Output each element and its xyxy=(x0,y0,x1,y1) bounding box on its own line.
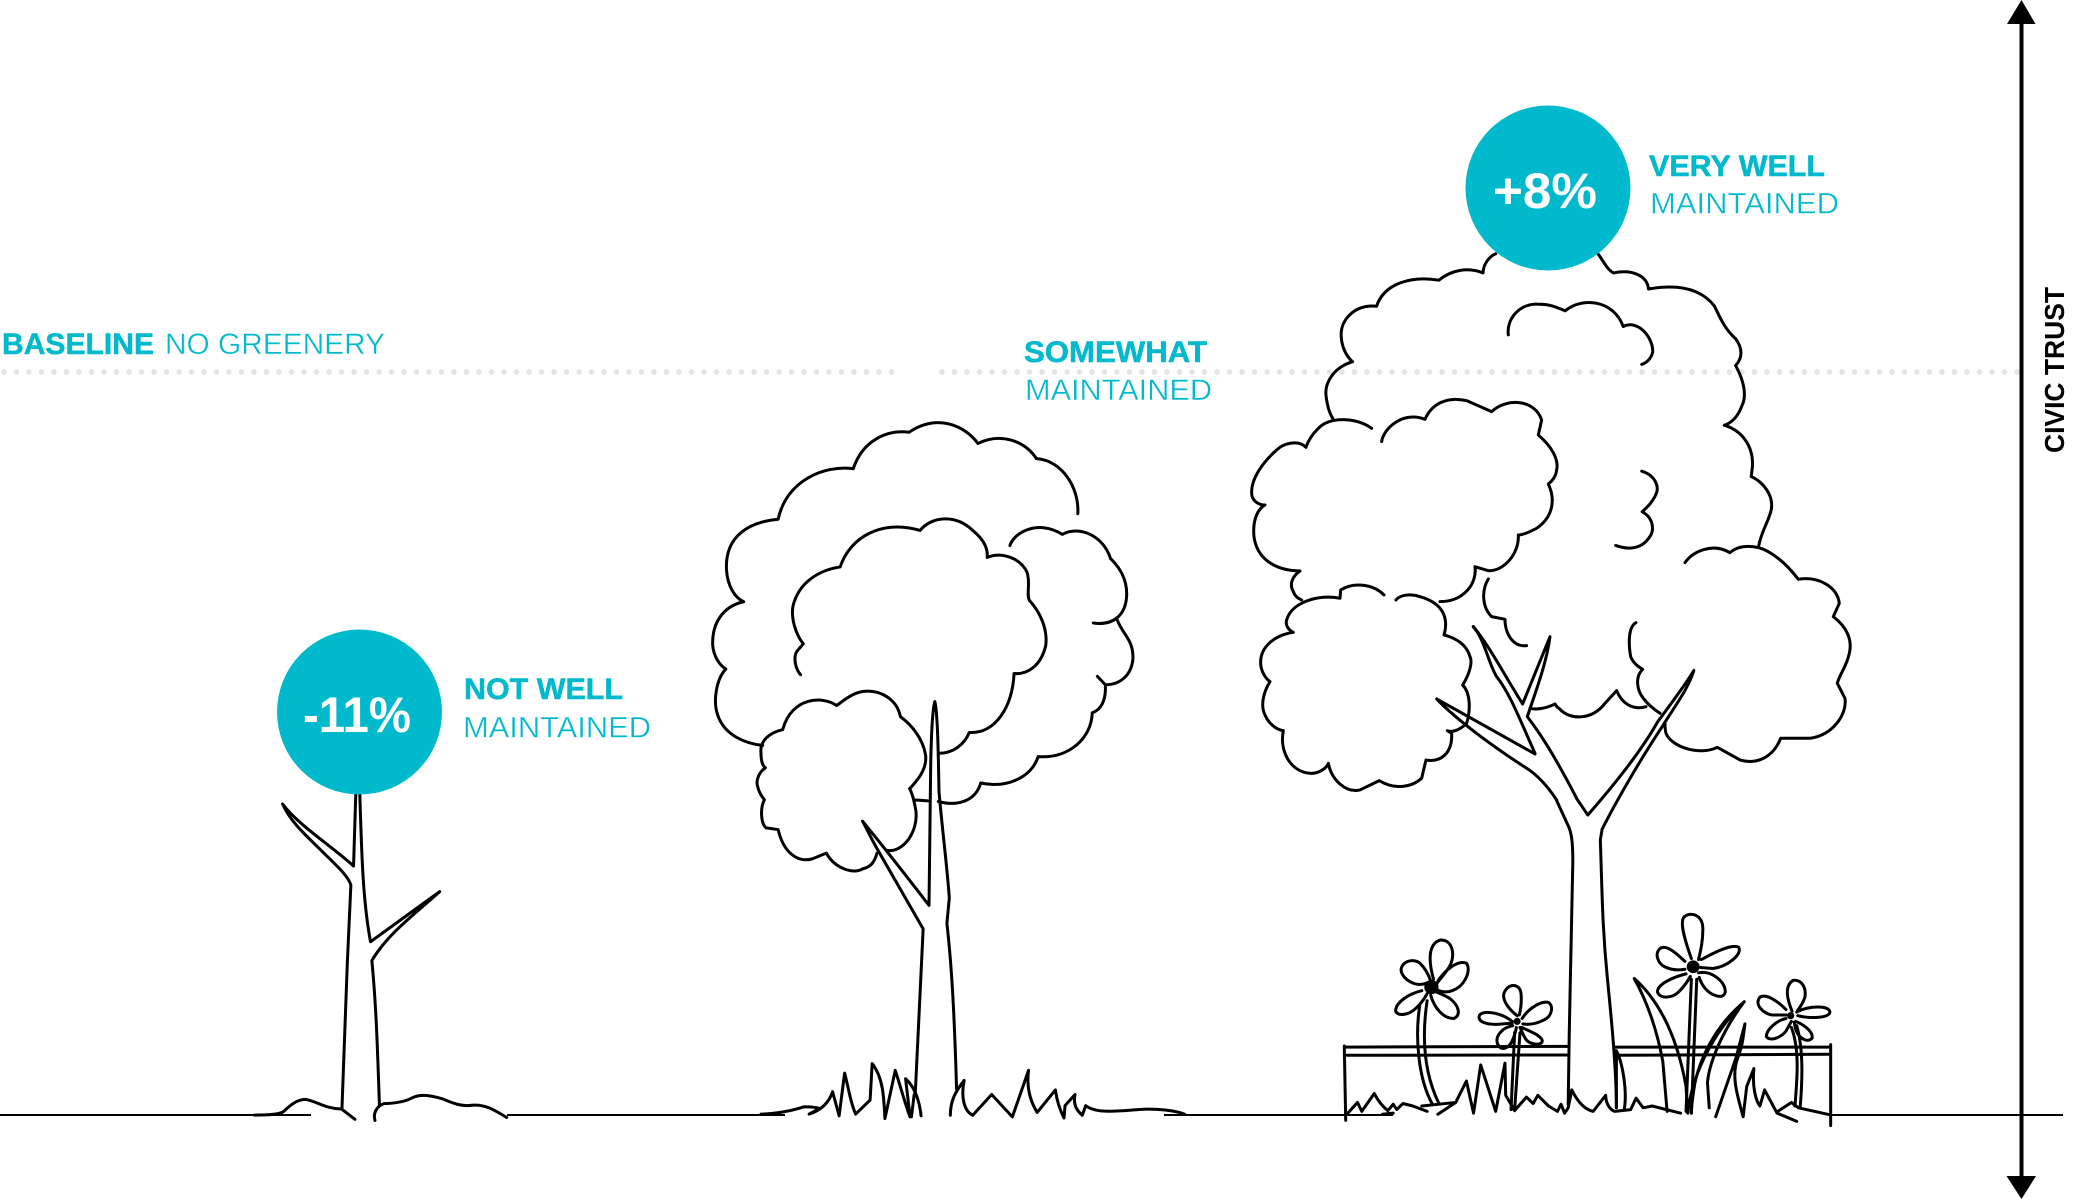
canopy: upper crown xyxy=(1326,254,1772,548)
arrow: civic trust axis xyxy=(2006,0,2036,1199)
grass xyxy=(1347,1063,1681,1114)
baseline label xyxy=(2,328,385,361)
baseline label: NO GREENERY xyxy=(165,328,385,361)
stat circle: plus 8 percent xyxy=(1466,106,1630,270)
label: very well maintained: VERY WELL xyxy=(1649,150,1825,183)
stat circle: minus 11 percent: -11% xyxy=(303,687,411,743)
label: not well maintained xyxy=(463,673,651,744)
label: somewhat maintained: MAINTAINED xyxy=(1025,374,1212,407)
trunk, planter and flowers xyxy=(1344,670,1831,1126)
tree: somewhat maintained xyxy=(713,423,1185,1119)
flower 4 xyxy=(1758,980,1830,1106)
tree: not well maintained sapling xyxy=(254,794,507,1120)
label: somewhat maintained xyxy=(1024,336,1212,407)
label: not well maintained: MAINTAINED xyxy=(463,712,651,744)
planter box xyxy=(1344,1045,1831,1126)
flower 3 xyxy=(1657,914,1739,1113)
baseline label: BASELINE xyxy=(2,328,154,361)
axis label: civic trust: CIVIC TRUST xyxy=(2039,287,2070,453)
label: somewhat maintained: SOMEWHAT xyxy=(1024,336,1207,369)
flower 1 xyxy=(1396,940,1468,1104)
tree: very well maintained xyxy=(1252,254,1850,1126)
canopy: right lobe xyxy=(1560,546,1850,761)
trunk xyxy=(1556,670,1694,1108)
label: not well maintained: NOT WELL xyxy=(464,673,623,706)
flower 2 xyxy=(1479,985,1552,1110)
stat circle: plus 8 percent: +8% xyxy=(1493,163,1597,219)
canopy: left lobes and branches xyxy=(1252,399,1577,800)
label: very well maintained: MAINTAINED xyxy=(1650,188,1839,220)
stat circle: minus 11 percent xyxy=(277,630,442,794)
label: very well maintained xyxy=(1649,150,1839,220)
